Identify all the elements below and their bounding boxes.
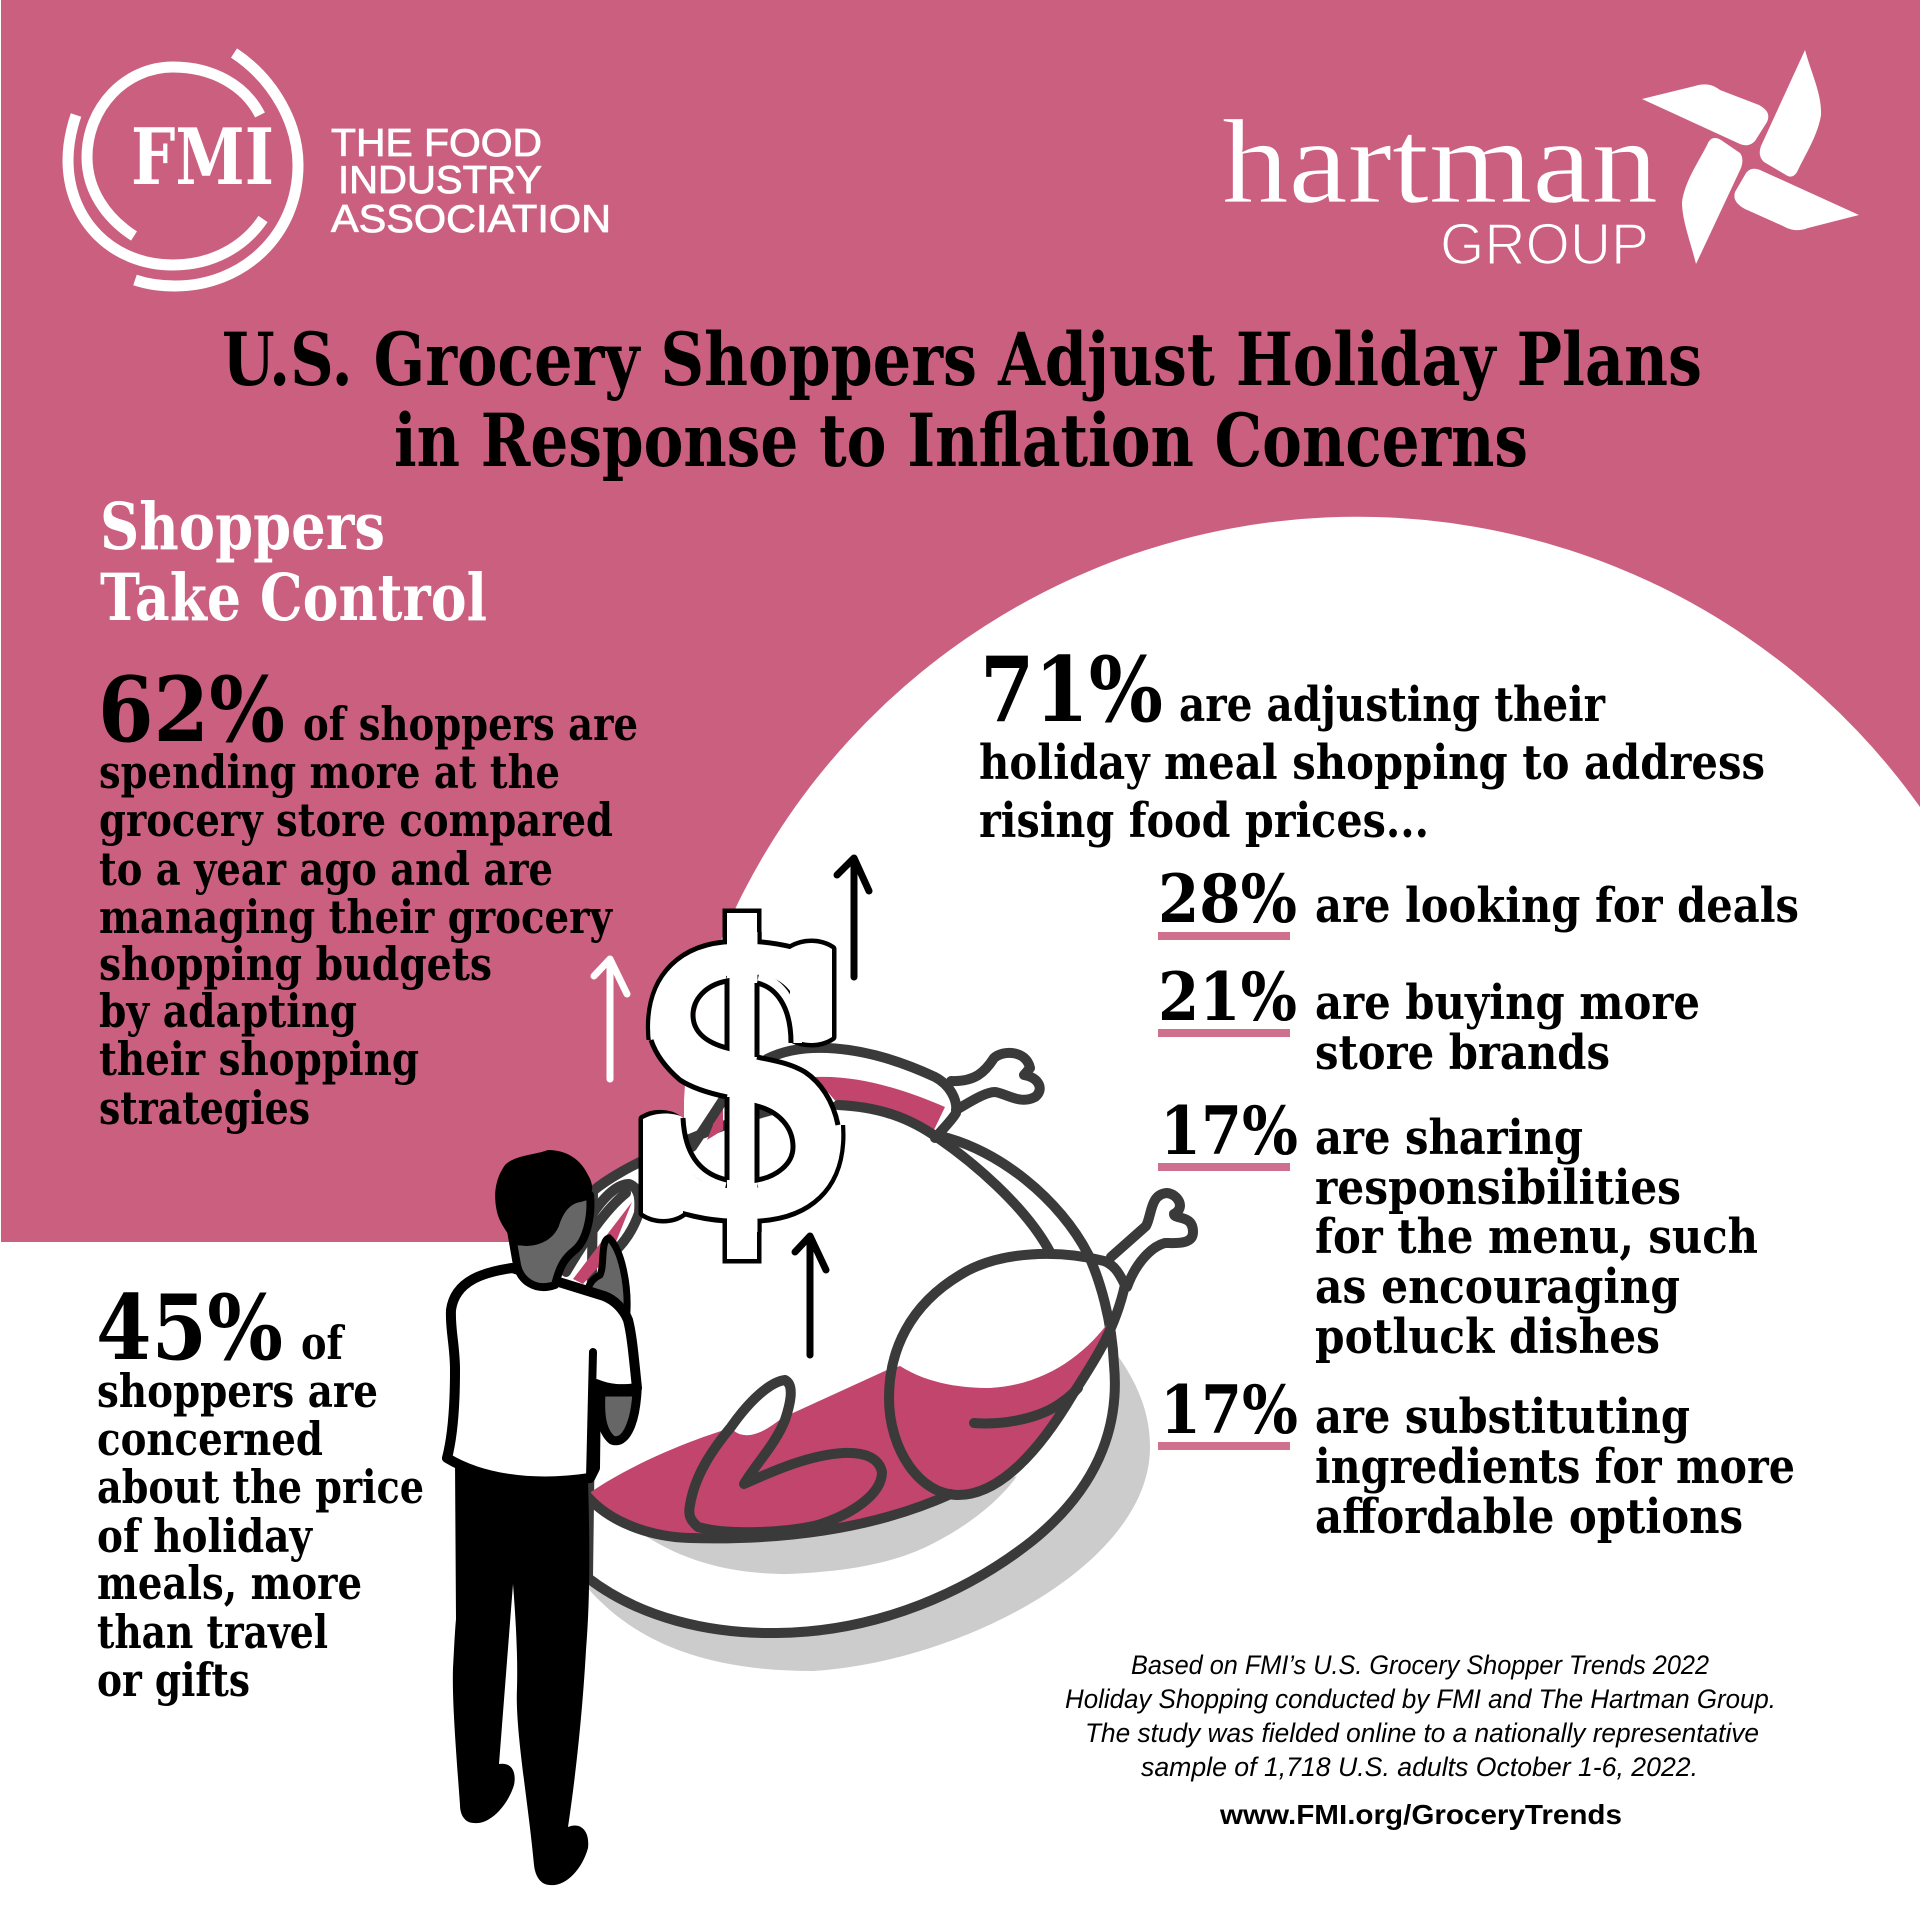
- description: concerned: [97, 1412, 323, 1466]
- description: spending more at the: [99, 745, 560, 799]
- dollar outline layer: [638, 908, 846, 1264]
- description: [97, 1316, 424, 1707]
- description: [1315, 1389, 1795, 1545]
- stat 17%: 17%: [1160, 1092, 1298, 1170]
- small wing: [689, 1380, 882, 1532]
- drumstick inner line: [974, 1388, 1078, 1423]
- description: about the price: [97, 1460, 424, 1514]
- logo: FMI The Food Industry Association: [68, 53, 611, 286]
- stat row: 28% deals: [1158, 860, 1799, 940]
- stat 45%: 45%: [96, 1275, 283, 1381]
- underline: [1158, 1163, 1290, 1171]
- back leg outline: [767, 1048, 956, 1138]
- description: affordable options: [1315, 1489, 1743, 1545]
- lower arm: [601, 1392, 637, 1441]
- heading: Shoppers Take Control: [100, 489, 487, 636]
- logo tagline: [331, 122, 611, 241]
- stat 17%: 17%: [1160, 1371, 1298, 1449]
- wordmark group: GROUP: [1440, 212, 1649, 277]
- description: [979, 677, 1765, 849]
- dollar fill layer: $: [622, 820, 867, 1307]
- source note: sample of 1,718 U.S. adults October 1-6, 2022.: [1141, 1752, 1698, 1782]
- icon: FMI rings: [68, 53, 298, 286]
- description: store brands: [1315, 1025, 1610, 1081]
- hair: [495, 1150, 592, 1245]
- text block: 45% of shoppers: [96, 1275, 424, 1707]
- logo wordmark FMI: FMI: [131, 112, 274, 203]
- description: of shoppers are: [303, 697, 638, 751]
- description: strategies: [99, 1081, 310, 1135]
- description: by adapting: [99, 984, 357, 1038]
- description: holiday meal shopping to address: [979, 735, 1765, 791]
- description: are sharing: [1315, 1110, 1583, 1166]
- turkey sliver behind dollar: [707, 1100, 723, 1140]
- description: shoppers are: [97, 1364, 378, 1418]
- description: are buying more: [1315, 975, 1700, 1031]
- stat 62%: 62%: [98, 657, 285, 763]
- description: rising food prices...: [979, 793, 1429, 849]
- stat 21%: 21%: [1158, 958, 1297, 1036]
- dollar fill layer: [643, 913, 842, 1259]
- near wing pink sliver: [573, 1202, 632, 1284]
- description: [99, 697, 638, 1135]
- underline: [1158, 1029, 1290, 1037]
- logo: Hartman Group: [1222, 50, 1859, 277]
- description: shopping budgets: [99, 937, 492, 991]
- source note: Based on FMI’s U.S. Grocery Shopper Trends 2022: [1131, 1650, 1709, 1680]
- face and neck: [510, 1195, 590, 1287]
- description: their shopping: [99, 1032, 419, 1086]
- website link text: www.FMI.org/GroceryTrends: [1219, 1799, 1622, 1830]
- description: meals, more: [97, 1556, 362, 1610]
- text block: 62% of shoppers: [98, 657, 638, 1135]
- source note: Holiday Shopping conducted by FMI and The Hartman Group.: [1065, 1684, 1776, 1714]
- description: [1315, 975, 1700, 1081]
- stat row: 21% store brands: [1158, 958, 1700, 1081]
- description: potluck dishes: [1315, 1309, 1660, 1365]
- icon: pinwheel: [1642, 50, 1859, 264]
- description: of: [301, 1316, 346, 1370]
- stat row: 17% substituting: [1158, 1371, 1795, 1545]
- turkey body arcs: [692, 1100, 1050, 1252]
- illustration: turkey on plate: [566, 1048, 1193, 1671]
- stat 28%: 28%: [1158, 860, 1297, 938]
- description: managing their grocery: [99, 890, 613, 944]
- near wing lower line: [566, 1193, 626, 1272]
- description: as encouraging: [1315, 1259, 1680, 1315]
- plate: [588, 1103, 1115, 1633]
- underline: [1158, 1442, 1290, 1450]
- description: or gifts: [97, 1653, 250, 1707]
- description: for the menu, such: [1315, 1209, 1758, 1265]
- dollar outline layer: $: [622, 820, 867, 1307]
- description: of holiday: [97, 1509, 313, 1563]
- panel: pink background with white circle cut-out: [1, 0, 1920, 1242]
- shirt: [447, 1268, 637, 1481]
- wordmark hartman: hartman: [1222, 95, 1658, 228]
- turkey back leg: [767, 1048, 956, 1138]
- front drumstick: [889, 1254, 1125, 1495]
- logo tagline: THE FOOD: [331, 122, 542, 165]
- source note: [1065, 1650, 1776, 1782]
- turkey pink shading: [591, 1319, 1111, 1540]
- description: ingredients for more: [1315, 1439, 1795, 1495]
- raised hand: [588, 1238, 627, 1310]
- dollar body with see-through counters: [638, 908, 846, 1264]
- description: are looking for deals: [1315, 878, 1799, 934]
- white band clearing leftover glyph edges around counters: [683, 974, 802, 1188]
- arrow: black up arrow right: [837, 858, 869, 977]
- turkey shadow on plate: [644, 1476, 1017, 1574]
- turkey back pink band: [815, 1077, 945, 1132]
- description: [1315, 1110, 1758, 1365]
- arrow: white up arrow: [594, 959, 627, 1079]
- description: are substituting: [1315, 1389, 1690, 1445]
- trousers: [453, 1462, 589, 1885]
- logo tagline: INDUSTRY: [338, 159, 542, 202]
- heading: Shoppers Take Control: Shoppers: [100, 489, 385, 565]
- plate shadow: [585, 1356, 1150, 1671]
- underline: [1158, 932, 1290, 940]
- stat row: 17% sharing responsibilities: [1158, 1092, 1758, 1365]
- title: [222, 317, 1702, 484]
- description: than travel: [97, 1605, 328, 1659]
- title: in Response to Inflation Concerns: [394, 398, 1528, 484]
- description: responsibilities: [1315, 1160, 1681, 1216]
- text block: 71% adjusting: [979, 637, 1765, 849]
- arrow: black up arrow lower: [795, 1236, 826, 1355]
- turkey bottom outline: [588, 1494, 951, 1538]
- source note: The study was fielded online to a nationally representative: [1085, 1718, 1759, 1748]
- dollar counter outlines: [651, 981, 838, 1180]
- logo tagline: ASSOCIATION: [331, 198, 611, 241]
- back leg bone: [951, 1053, 1040, 1110]
- sleeve line: [590, 1352, 593, 1478]
- heading: Shoppers Take Control: Take Control: [100, 560, 487, 636]
- near wing left: [591, 1184, 639, 1252]
- description: are adjusting their: [1179, 677, 1606, 733]
- stat 71%: 71%: [980, 637, 1163, 743]
- icon: dollar sign: [638, 908, 846, 1264]
- description: to a year ago and are: [99, 842, 553, 896]
- front bone: [1111, 1193, 1193, 1287]
- icon: person viewed from behind: [447, 1150, 637, 1885]
- description: grocery store compared: [99, 793, 613, 847]
